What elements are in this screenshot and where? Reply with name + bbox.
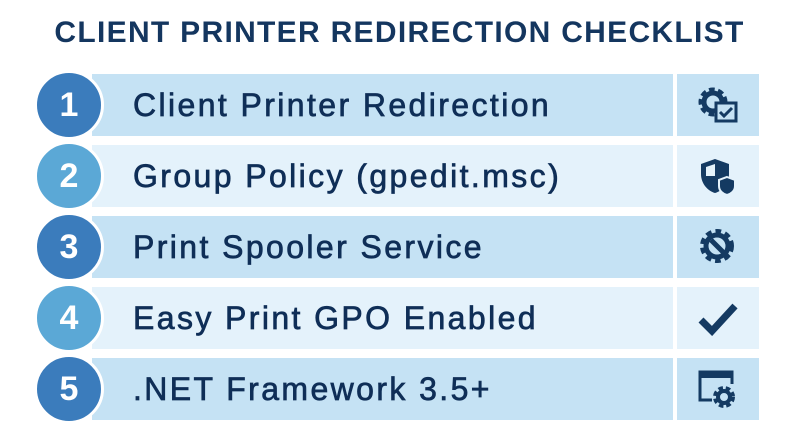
icon: shield xyxy=(701,159,734,194)
row 5: .NET Framework 3.5+ xyxy=(133,371,492,407)
row 2 xyxy=(37,144,759,208)
title: CLIENT PRINTER REDIRECTION CHECKLIST xyxy=(54,16,745,49)
row 2: 2 xyxy=(60,156,78,194)
icon: window gear xyxy=(698,370,735,408)
icon: checkmark xyxy=(698,304,738,336)
row 3 xyxy=(37,215,759,279)
row 5 xyxy=(37,357,759,421)
row 5: 5 xyxy=(60,370,78,408)
row 1: 1 xyxy=(60,86,78,124)
row 4: Easy Print GPO Enabled xyxy=(133,300,538,336)
row 3: 3 xyxy=(60,228,78,266)
row 2: Group Policy (gpedit.msc) xyxy=(133,158,561,194)
icon: gear with checkbox xyxy=(698,88,738,122)
icon: gear wrench xyxy=(700,229,734,263)
row 4: 4 xyxy=(60,298,78,336)
row 1: Client Printer Redirection xyxy=(133,87,551,123)
row 3: Print Spooler Service xyxy=(133,229,484,265)
row 4 xyxy=(37,286,759,350)
row 1 xyxy=(37,73,759,137)
